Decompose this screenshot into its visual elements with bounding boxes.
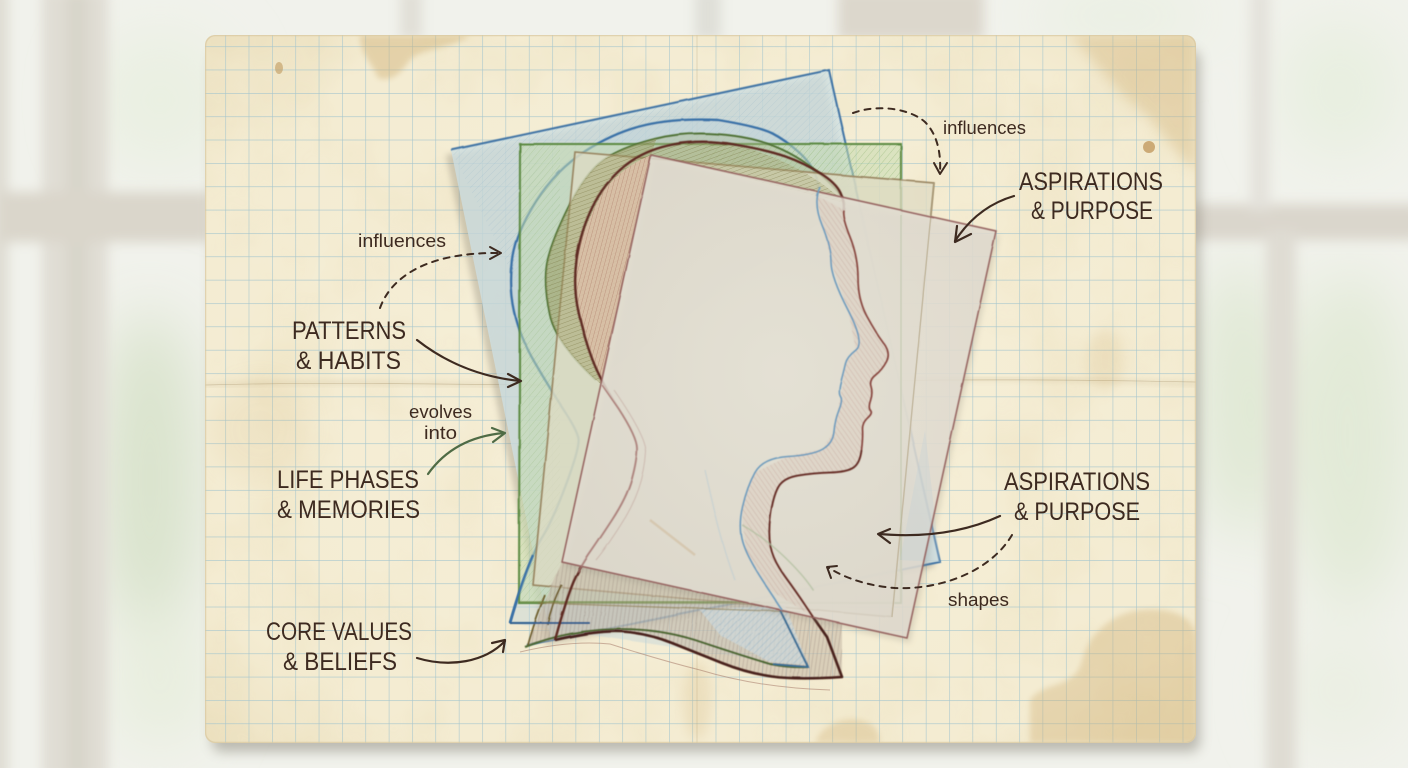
arrow: patterns to sheet (417, 340, 521, 387)
label: aspirations and purpose (lower): & PURPOSE (1014, 498, 1140, 526)
note: evolves into (409, 402, 472, 443)
layer: green sheet (510, 144, 901, 623)
layer: rose sheet (562, 155, 999, 643)
arrow: influences top right, dashed (853, 108, 947, 174)
arrow: shapes, dashed (827, 535, 1012, 588)
arrow: to top aspirations sheet (955, 196, 1014, 242)
note: evolves into: evolves (409, 402, 472, 422)
layer: blue sheet (446, 70, 940, 645)
layer: rose head with hair shading (520, 138, 845, 690)
label: aspirations and purpose (top): & PURPOSE (1031, 197, 1153, 225)
layer: green head (546, 134, 845, 380)
label: core values and beliefs: CORE VALUES (266, 618, 412, 646)
label: aspirations and purpose (top) (1019, 168, 1163, 225)
note: influences (top right): influences (943, 118, 1026, 138)
illustration: layered head silhouettes on translucent sheets (446, 70, 999, 690)
label: core values and beliefs: & BELIEFS (283, 648, 397, 676)
label: core values and beliefs (266, 618, 412, 676)
paper drop shadow (212, 50, 1200, 752)
label: life phases and memories: & MEMORIES (277, 496, 420, 524)
label: life phases and memories (277, 466, 420, 524)
panel: aged graph paper (205, 35, 1196, 743)
note: shapes: shapes (948, 590, 1009, 610)
label: aspirations and purpose (top): ASPIRATIONS (1019, 168, 1163, 196)
layer: blue head (510, 120, 859, 667)
label: patterns and habits (292, 317, 406, 375)
label: aspirations and purpose (lower): ASPIRATIONS (1004, 468, 1150, 496)
label: patterns and habits: & HABITS (296, 347, 401, 375)
arrow: evolves into, green (428, 428, 505, 474)
label: life phases and memories: LIFE PHASES (277, 466, 419, 494)
note: evolves into: into (424, 423, 457, 443)
label: patterns and habits: PATTERNS (292, 317, 406, 345)
arrow: core values (417, 640, 505, 663)
label: aspirations and purpose (lower) (1004, 468, 1150, 526)
arrow: influences left, dashed (380, 247, 501, 308)
layer: tan sheet (533, 152, 934, 617)
layer: shoulder hatching (510, 562, 842, 679)
arrow: lower aspirations (878, 516, 1000, 543)
note: influences (left): influences (358, 231, 446, 251)
face profile strokes over sheet (578, 187, 888, 617)
